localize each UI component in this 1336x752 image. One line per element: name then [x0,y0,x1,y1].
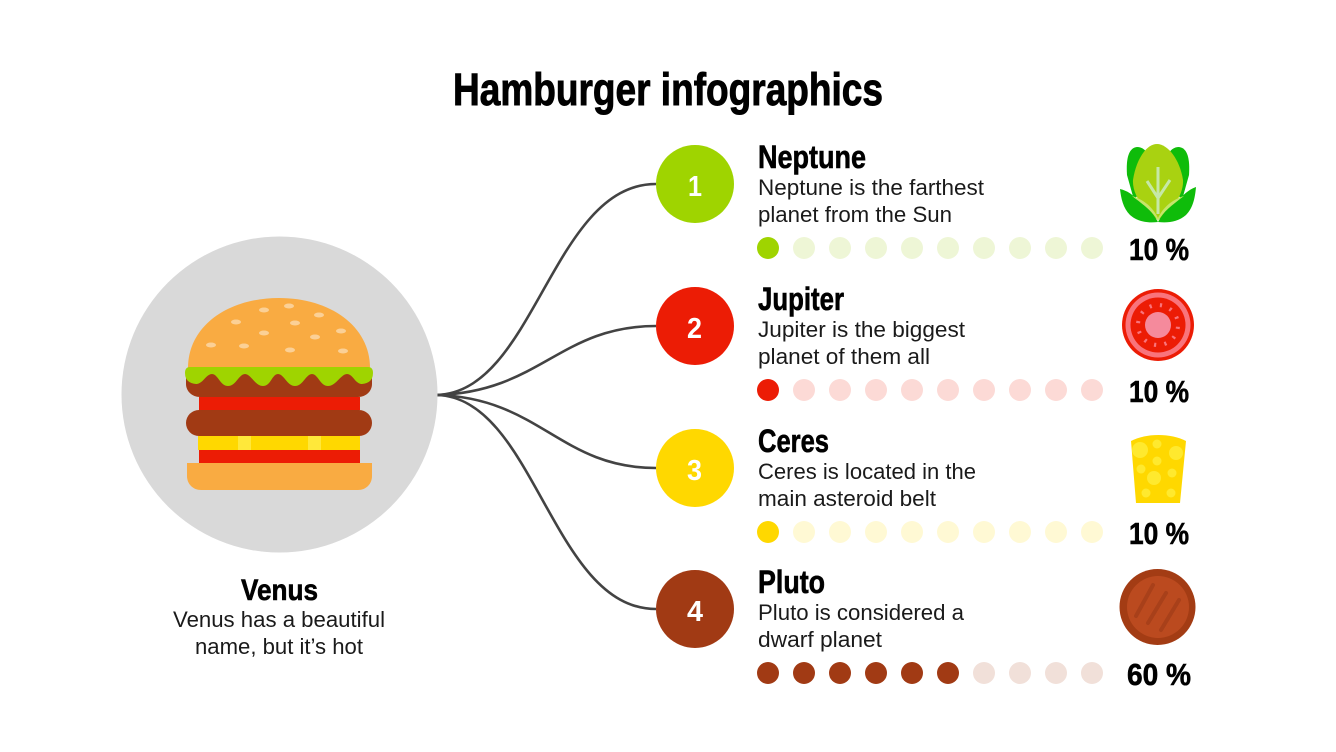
description: planet of them all [758,344,930,369]
heading: Jupiter [758,281,844,317]
lower tomato [199,450,360,463]
heading: Ceres [758,423,829,459]
percentage: 10 % [1129,232,1189,267]
description: dwarf planet [758,627,882,652]
title: Hamburger infographics [453,64,883,115]
icon: top bun [188,298,370,368]
icon: patty [1120,569,1196,645]
tomato slice [199,397,360,410]
description: planet from the Sun [758,202,952,227]
progress dots [757,237,1103,259]
number badge 3: 3 [687,455,702,487]
connector lines [437,184,656,609]
percentage: 10 % [1129,516,1189,551]
number badge 1: 1 [688,171,702,203]
description: main asteroid belt [758,486,936,511]
description [758,459,976,511]
heading: Pluto [758,564,825,600]
description [758,317,965,369]
upper patty [186,372,372,397]
description [758,175,984,227]
description [758,600,965,652]
number badge 2: 2 [687,313,702,345]
sesame seeds [206,304,348,354]
heading: Neptune [758,139,866,175]
description: Jupiter is the biggest [758,317,965,342]
icon: tomato [1122,289,1194,361]
number badge 3 [656,429,734,507]
progress dots [757,521,1103,543]
progress dots [757,662,1103,684]
number badge 1 [656,145,734,223]
text: Venus [173,574,385,659]
icon: lettuce [1120,144,1196,222]
lettuce [185,367,373,386]
panel: Neptune [656,139,1196,267]
panel: burger illustration [122,236,438,552]
description: Pluto is considered a [758,600,965,625]
lower patty [186,410,372,436]
description: Neptune is the farthest [758,175,984,200]
cheese [198,436,360,450]
panel: Ceres [656,423,1189,551]
panel: Jupiter [656,281,1194,409]
number badge 4 [656,570,734,648]
panel: Pluto [656,564,1196,692]
description: Ceres is located in the [758,459,976,484]
text: Venus: Venus has a beautiful [173,607,385,632]
text: Venus: name, but it’s hot [195,634,363,659]
icon: cheese [1131,435,1186,503]
number badge 2 [656,287,734,365]
number badge 4: 4 [687,596,703,628]
progress dots [757,379,1103,401]
bottom bun [187,463,372,490]
percentage: 10 % [1129,374,1189,409]
percentage: 60 % [1127,657,1191,692]
text: Venus: Venus [241,574,318,607]
